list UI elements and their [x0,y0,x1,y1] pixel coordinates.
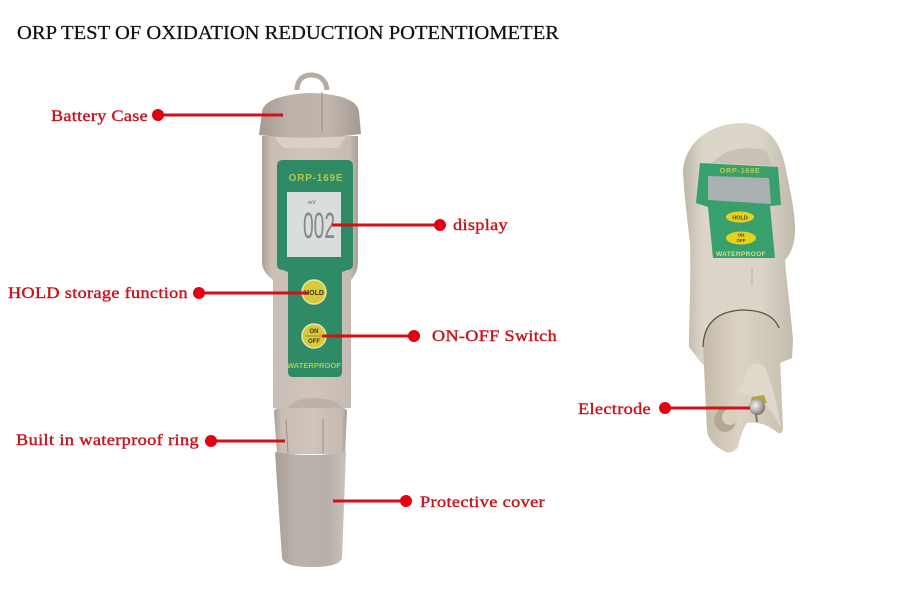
ON-OFF button: OFF [736,238,746,243]
ON-OFF button [302,324,326,348]
green panel [696,163,781,258]
electrode recess [736,363,781,428]
protective cover [275,452,346,567]
HOLD button: HOLD [732,216,748,222]
ON-OFF button [726,232,756,244]
label: electrode [578,401,750,418]
label: electrode: Electrode [578,401,651,418]
ON-OFF button: ON [738,232,744,238]
electrode tube [703,310,783,452]
label: hold storage function: HOLD storage function [8,285,188,302]
ON-OFF button: OFF [308,339,320,345]
head and body [683,123,795,365]
label: battery case: Battery Case [51,108,148,125]
cap loop [297,75,327,90]
label: on-off switch [322,328,557,345]
label: display: display [453,217,508,234]
label: protective cover: Protective cover [420,494,545,511]
label: hold storage function [8,285,308,302]
HOLD button [726,212,754,222]
LCD reading [303,200,335,246]
label: built in waterproof ring: Built in waterproof ring [16,432,199,449]
LCD [708,176,771,204]
label: built in waterproof ring [16,432,285,449]
label: protective cover [333,494,545,511]
LCD reading: 002 [303,205,335,246]
LCD reading: mV [308,200,316,206]
electrode tip [749,395,767,422]
model name: ORP-169E [289,173,343,184]
LCD display [287,192,341,257]
HOLD button [302,280,326,304]
model name: ORP-169E [719,166,761,175]
meter body [262,136,358,408]
right meter: angled view [683,123,795,452]
label: battery case [51,108,283,125]
label: display [332,217,508,234]
waterproof text: WATERPROOF [716,251,766,258]
title: ORP TEST OF OXIDATION REDUCTION POTENTIOMETER [17,22,560,44]
ON-OFF button: ON [310,329,318,335]
green panel [277,160,353,377]
waterproof ring [274,408,347,454]
waterproof text: WATERPROOF [287,361,341,370]
HOLD button: HOLD [304,290,324,297]
left meter: front view [259,75,361,567]
label: on-off switch: ON-OFF Switch [432,328,557,345]
battery cap [259,93,361,138]
